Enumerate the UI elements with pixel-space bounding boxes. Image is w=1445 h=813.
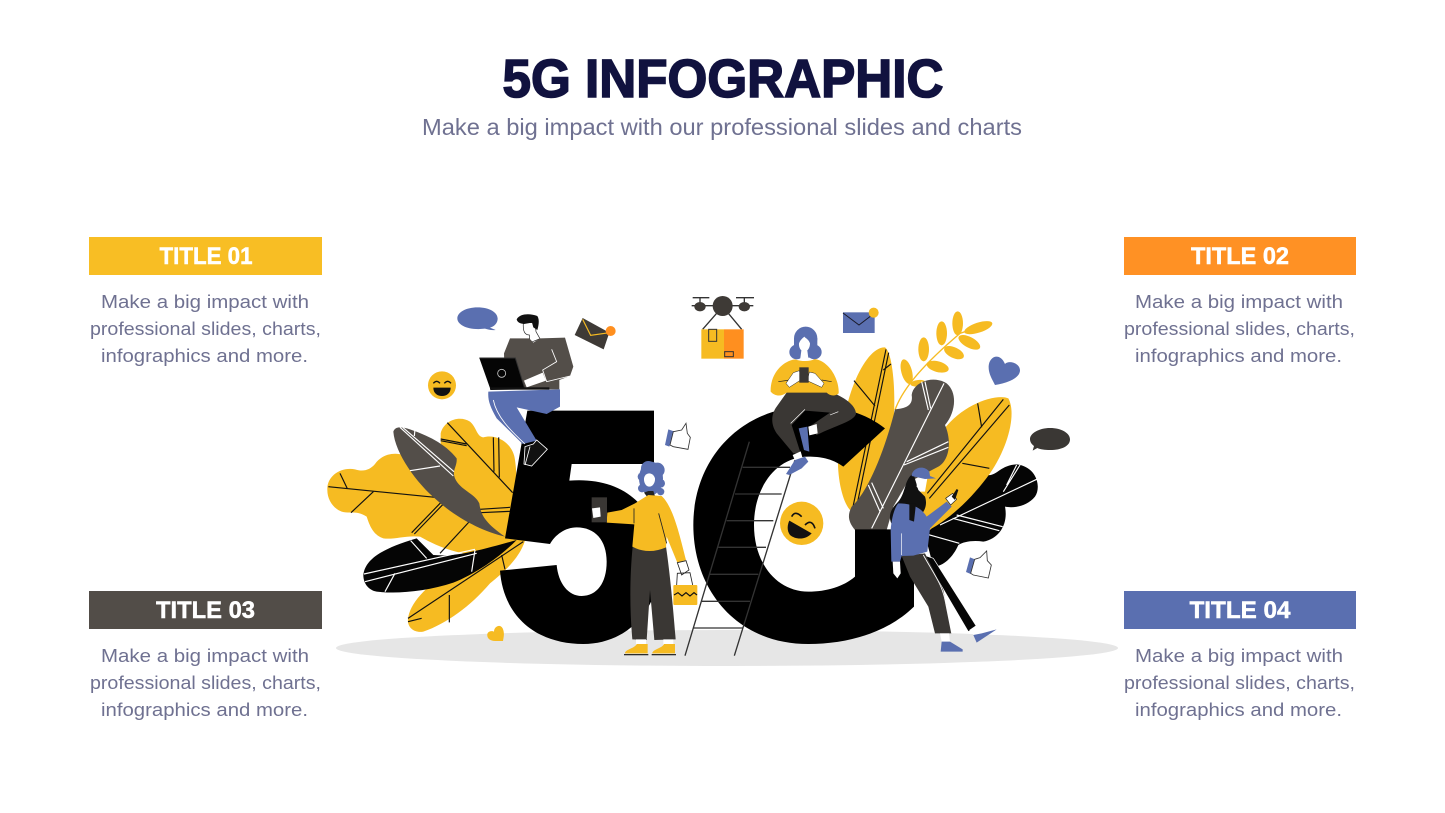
panel: title 04 [1124, 591, 1356, 720]
panel: title 03 [89, 591, 322, 720]
body text: title 03: infographics and more. [101, 700, 308, 720]
hair [789, 327, 822, 359]
big number 5 [500, 411, 660, 644]
left half of illustration [327, 307, 697, 655]
yellow sprig [895, 311, 994, 410]
icon: smiling emoji [428, 371, 456, 399]
sweater [771, 359, 839, 396]
icon: blue speech bubble [457, 307, 498, 330]
icon: thumbs up lower right [966, 551, 991, 578]
heading: title 03: TITLE 03 [156, 597, 255, 624]
yellow lobed leaf [327, 419, 525, 632]
sweater and arms [607, 495, 686, 563]
handbag [673, 561, 697, 605]
icon: blue heart [989, 357, 1020, 385]
body text: title 01: infographics and more. [101, 346, 308, 366]
icon: envelope with orange dot [575, 318, 616, 349]
body text: title 01: professional slides, charts, [90, 319, 321, 339]
icon: small yellow heart [487, 626, 504, 641]
icon: blue envelope [843, 308, 879, 333]
hand [524, 373, 546, 387]
shoes [524, 440, 547, 466]
black lobed leaf [925, 464, 1038, 567]
right foliage [838, 311, 1038, 567]
header bar: title 04 [1124, 591, 1356, 629]
icon: thumbs up [665, 423, 690, 449]
body text: title 04: Make a big impact with [1135, 646, 1343, 666]
person with laptop [479, 314, 573, 466]
subtitle: Make a big impact with our professional slides and charts [422, 114, 1022, 140]
heading: title 04: TITLE 04 [1190, 597, 1291, 624]
body text: title 02: infographics and more. [1135, 346, 1342, 366]
right half of illustration [685, 296, 1070, 656]
laptop [479, 358, 549, 390]
gray lobed leaf [849, 380, 954, 530]
yellow leaf veins [328, 423, 523, 622]
woman with yellow sweater and bag [592, 461, 697, 655]
black leaf [363, 538, 517, 593]
heading: title 01: TITLE 01 [160, 243, 252, 270]
header bar: title 02 [1124, 237, 1356, 275]
far leg [923, 555, 977, 632]
panel: title 02 [1124, 237, 1356, 366]
body text: title 03: professional slides, charts, [90, 673, 321, 693]
shoes [940, 625, 982, 642]
body text: title 04: professional slides, charts, [1124, 673, 1355, 693]
gray leaf [393, 427, 505, 537]
face [799, 337, 810, 352]
head [523, 323, 540, 343]
face [917, 478, 927, 492]
body text: title 04: infographics and more. [1135, 700, 1342, 720]
heading: title 02: TITLE 02 [1191, 243, 1289, 270]
torso [504, 338, 573, 389]
trousers [630, 547, 676, 640]
icon: dark speech bubble [1030, 428, 1070, 451]
hair [638, 461, 665, 495]
body text: title 01: Make a big impact with [101, 292, 309, 312]
face [644, 473, 655, 487]
body text: title 02: professional slides, charts, [1124, 319, 1355, 339]
header bar: title 01 [89, 237, 322, 275]
hair [890, 473, 926, 527]
woman in cap walking [890, 468, 997, 652]
near leg [902, 553, 952, 633]
body text: title 01 [90, 292, 321, 366]
yellow right leaf [919, 397, 1012, 533]
body text: title 03 [90, 646, 321, 720]
phone [592, 497, 607, 522]
hand and phone [946, 493, 957, 505]
jacket [891, 502, 952, 562]
hands holding phone [786, 371, 824, 387]
trousers [488, 389, 560, 444]
icon: laughing emoji [780, 502, 823, 545]
body text: title 04 [1124, 646, 1355, 720]
cap [912, 468, 936, 479]
hair [517, 314, 539, 330]
body text: title 02 [1124, 292, 1355, 366]
title: 5G INFOGRAPHIC [502, 49, 944, 109]
trousers and raised leg [772, 392, 856, 453]
icon: drone carrying parcel [692, 296, 754, 359]
central illustration: 5G with people and plants [327, 296, 1118, 666]
body text: title 02: Make a big impact with [1135, 292, 1343, 312]
ladder [685, 442, 795, 656]
shoes [799, 427, 809, 452]
shoes [636, 639, 673, 645]
black leaf veins [364, 541, 477, 592]
left foliage [327, 419, 525, 632]
header bar: title 03 [89, 591, 322, 629]
body text: title 03: Make a big impact with [101, 646, 309, 666]
panel: title 01 [89, 237, 322, 366]
ground shadow [336, 630, 1118, 666]
big letter G [693, 406, 914, 644]
gray leaf veins [400, 427, 454, 476]
woman sitting on G with phone [771, 327, 856, 475]
yellow tall leaf [838, 347, 894, 510]
